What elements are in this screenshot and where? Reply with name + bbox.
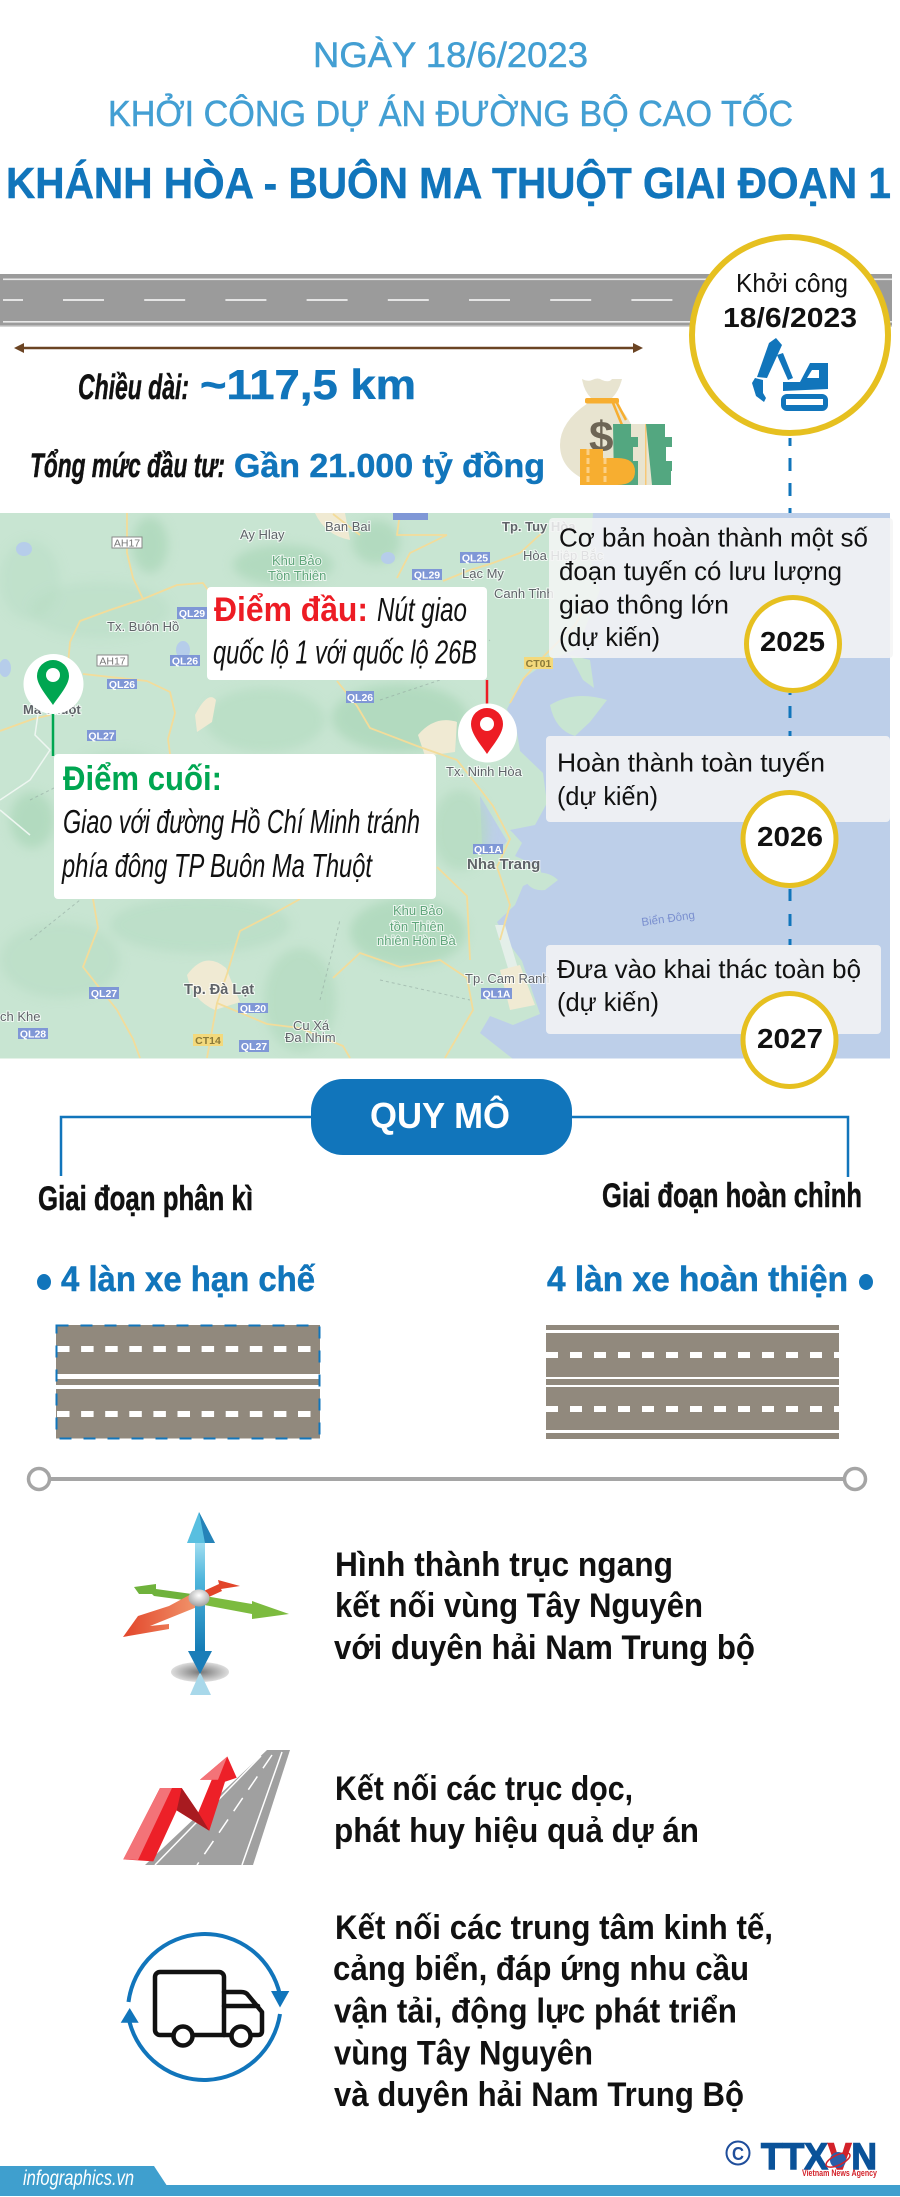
callout: end point: phía đông TP Buôn Ma Thuột <box>61 847 373 884</box>
map road shields: QL27 <box>88 730 115 742</box>
text: economic hubs: và duyên hải Nam Trung Bộ <box>334 2076 744 2114</box>
icon: money bag: $ <box>589 413 613 462</box>
map place labels: Ma Thuột <box>23 702 81 717</box>
map place labels: Ban Bai <box>325 519 371 534</box>
panel: milestone 2025 text <box>549 518 893 658</box>
map lakes <box>0 542 395 677</box>
end point connector <box>52 700 54 756</box>
map place labels: Đa Nhim <box>285 1030 336 1045</box>
scale bracket lines <box>61 1117 848 1177</box>
map place labels: Tp. Cam Ranh <box>465 971 550 986</box>
map beige urban areas <box>187 513 535 1010</box>
text: horizontal axis <box>334 1546 755 1667</box>
map road shields: QL26 <box>109 679 135 691</box>
callout: end point: Điểm cuối: <box>63 760 222 798</box>
timeline dashed line <box>788 438 792 945</box>
callout: start point: Nút giao <box>377 591 467 628</box>
icon: truck in cycle <box>121 1934 289 2080</box>
map place labels: Nha Trang <box>467 856 540 873</box>
year badge 2026 <box>743 792 836 886</box>
map place labels: Tồn Thiên <box>268 568 326 583</box>
panel: milestone 2025 text: đoạn tuyến có lưu lượng <box>559 556 842 586</box>
panel: milestone 2026 text <box>546 736 890 822</box>
icon: money bag <box>560 378 672 485</box>
map roads <box>0 513 590 1058</box>
map road shields: QL26 <box>347 692 373 704</box>
map place labels: Khu Bảo <box>393 903 443 918</box>
divider with end rings <box>28 1468 866 1490</box>
road banner <box>0 274 892 327</box>
map place labels: Tx. Buôn Hồ <box>107 619 179 634</box>
investment text: Gần 21.000 tỷ đồng <box>234 447 545 484</box>
map road shields: QL20 <box>240 1003 266 1015</box>
text: horizontal axis: với duyên hải Nam Trung bộ <box>334 1629 755 1667</box>
panel: milestone 2026 text: Hoàn thành toàn tuyến <box>557 748 825 778</box>
investment text: Tổng mức đầu tư: <box>30 447 225 485</box>
map place labels: Hòa Hiệp Bắc <box>523 548 604 563</box>
panel: milestone 2027 text: (dự kiến) <box>557 987 659 1017</box>
panel: milestone 2027 text: Đưa vào khai thác toàn bộ <box>557 954 861 984</box>
text: economic hubs: vùng Tây Nguyên <box>334 2035 593 2073</box>
road diagram: phased <box>56 1325 320 1438</box>
map road shields: QL26 <box>172 656 198 668</box>
panel: milestone 2025 text: Cơ bản hoàn thành một số <box>559 522 868 552</box>
year badge 2027 <box>743 994 836 1086</box>
map place labels: Cu Xá <box>293 1018 330 1033</box>
map place labels: Canh Tỉnh <box>494 586 554 601</box>
map road shields <box>18 513 553 1053</box>
heading: QUY MÔ pill <box>311 1079 572 1155</box>
text: economic hubs: cảng biển, đáp ứng nhu cầu <box>333 1950 749 1988</box>
text: horizontal axis: kết nối vùng Tây Nguyên <box>335 1587 703 1625</box>
start badge circle: Khởi công <box>736 268 848 298</box>
text: economic hubs: vận tải, động lực phát triển <box>334 1992 737 2030</box>
callout: start point: quốc lộ 1 với quốc lộ 26B <box>213 634 477 670</box>
heading: QUY MÔ pill: QUY MÔ <box>370 1094 510 1136</box>
icon: axes arrows <box>123 1512 289 1695</box>
text: economic hubs <box>333 1909 773 2114</box>
callout: end point <box>54 754 436 899</box>
map road shields: AH17 <box>99 656 126 668</box>
start point connector <box>486 680 488 712</box>
map place labels: Tp. Đà Lạt <box>184 982 254 998</box>
text: vertical axes <box>334 1770 699 1850</box>
investment text <box>30 447 545 485</box>
length text: Chiều dài: <box>78 368 189 407</box>
start badge circle <box>692 237 888 433</box>
icon: excavator <box>752 338 828 411</box>
year badge 2025: 2025 <box>760 626 825 657</box>
map road shields: QL29 <box>179 608 205 620</box>
map place labels: Ay Hlay <box>240 527 285 542</box>
year badge 2026: 2026 <box>757 821 823 852</box>
title: project line: KHỞI CÔNG DỰ ÁN ĐƯỜNG BỘ CAO TỐC <box>108 92 793 134</box>
length arrow <box>14 343 643 353</box>
icon: road with red arrow <box>123 1750 290 1865</box>
text: vertical axes: phát huy hiệu quả dự án <box>334 1812 699 1850</box>
map place labels: Tp. Tuy Hòa <box>502 519 576 534</box>
text: vertical axes: Kết nối các trục dọc, <box>335 1770 633 1808</box>
panel: milestone 2025 text: (dự kiến) <box>559 622 660 652</box>
map place labels: Lạc My <box>462 566 504 581</box>
callout: start point <box>207 587 487 680</box>
footer bar <box>0 2166 900 2196</box>
text: economic hubs: Kết nối các trung tâm kinh tế, <box>335 1909 773 1947</box>
icon: green end pin <box>24 654 84 714</box>
map road shields: CT14 <box>195 1035 221 1047</box>
map road shields: QL27 <box>241 1041 267 1053</box>
map panel <box>0 513 890 1059</box>
year badge 2027: 2027 <box>757 1023 823 1054</box>
map place labels: nhiên Hòn Bà <box>377 933 457 948</box>
label: 4 complete lanes: 4 làn xe hoàn thiện <box>547 1260 848 1299</box>
panel: milestone 2026 text: (dự kiến) <box>557 781 658 811</box>
map place labels: tồn Thiên <box>390 919 444 934</box>
map place labels <box>0 519 696 1045</box>
map place labels: ch Khe <box>0 1009 40 1024</box>
logo: TTXVN: Vietnam News Agency <box>802 2168 878 2179</box>
map road shields: QL29 <box>414 570 440 582</box>
label: 4 limited lanes: 4 làn xe hạn chế <box>61 1260 315 1299</box>
map road shields: CT01 <box>526 658 551 670</box>
map road shields: QL28 <box>20 1028 46 1040</box>
length text <box>78 361 416 408</box>
road diagram: complete <box>546 1325 839 1439</box>
map place labels: Biển Đông <box>641 910 696 929</box>
map road shields: QL27 <box>91 988 117 1000</box>
panel: milestone 2027 text <box>546 945 881 1034</box>
map road shields: QL25 <box>462 552 488 564</box>
panel: milestone 2025 text: giao thông lớn <box>559 590 729 620</box>
callout: start point: Điểm đầu: <box>214 591 368 629</box>
icon: red start pin <box>458 704 517 762</box>
title: date line: NGÀY 18/6/2023 <box>313 36 588 75</box>
heading: phased stage: Giai đoạn phân kì <box>38 1180 253 1218</box>
map place labels: Khu Bảo <box>272 553 322 568</box>
map road shields: QL1A <box>482 988 511 1000</box>
length text: ~117,5 km <box>200 361 416 408</box>
start badge circle: 18/6/2023 <box>723 302 857 333</box>
map road shields: AH17 <box>114 538 140 550</box>
text: horizontal axis: Hình thành trục ngang <box>335 1546 673 1584</box>
footer bar: infographics.vn <box>23 2167 134 2190</box>
logo: TTXVN: C <box>732 2144 744 2164</box>
callout: end point: Giao với đường Hồ Chí Minh tránh <box>63 803 420 840</box>
map place labels: Tx. Ninh Hòa <box>446 764 523 779</box>
map road shields: QL1A <box>474 844 502 856</box>
logo: TTXVN: TTXVN <box>761 2135 877 2177</box>
map forest shading <box>0 517 488 1052</box>
year badge 2025 <box>746 598 840 690</box>
